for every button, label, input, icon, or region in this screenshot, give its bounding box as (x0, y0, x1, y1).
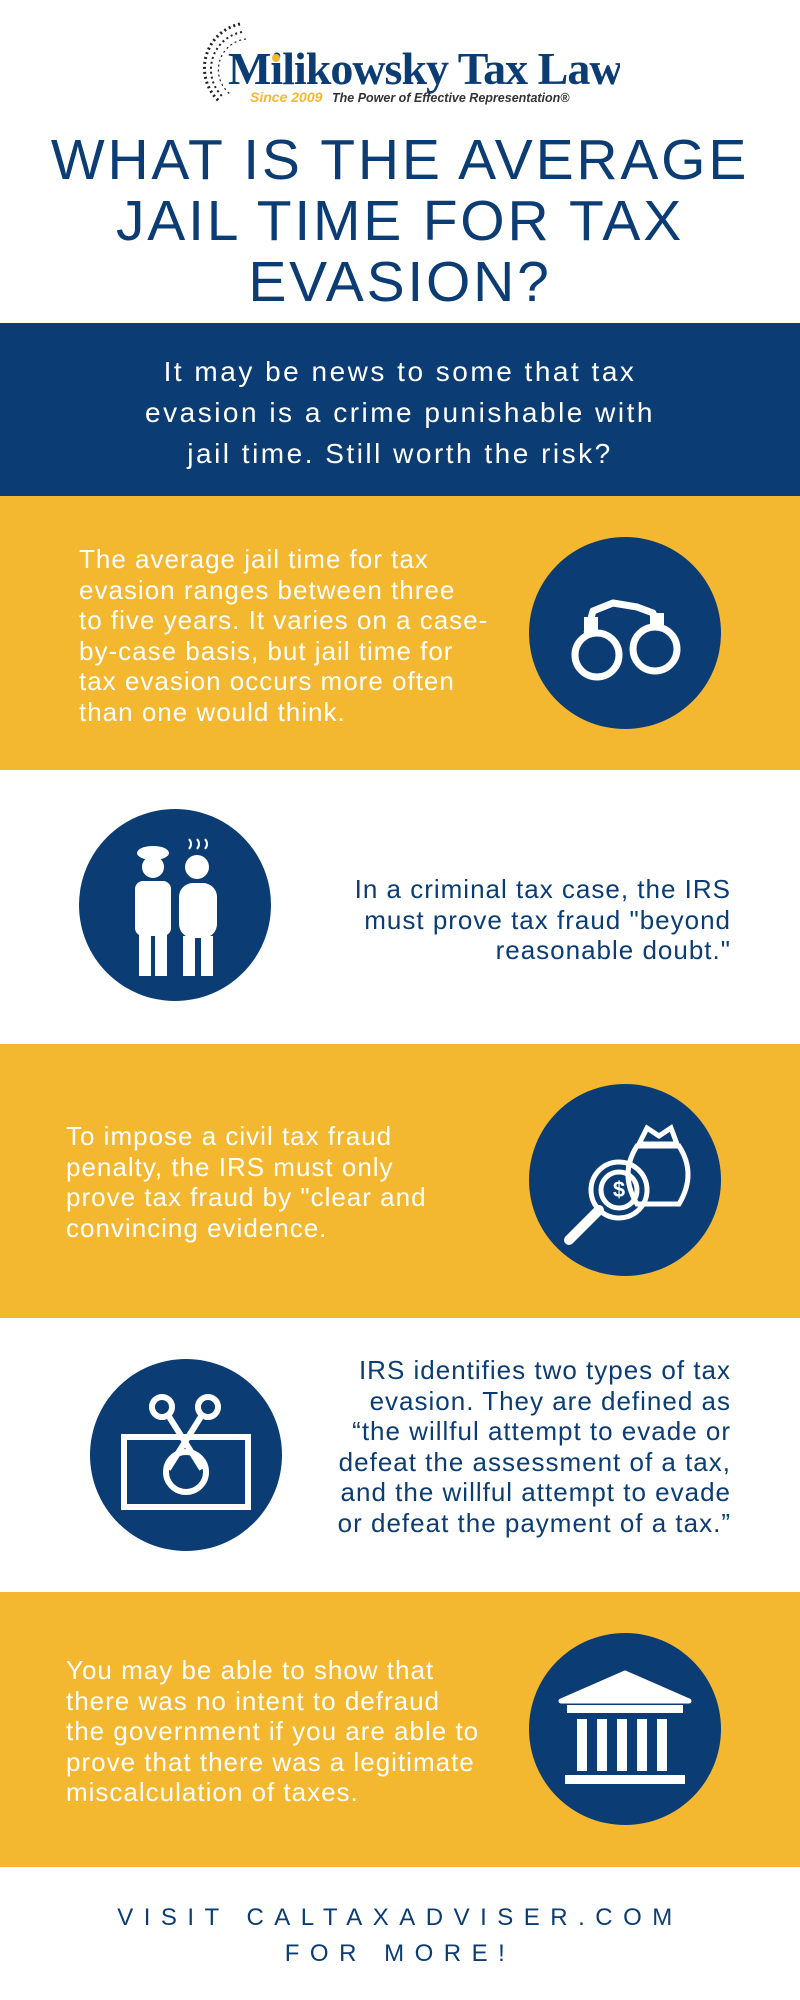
text: criminal tax case: must prove tax fraud "beyond (364, 904, 731, 934)
text: no intent: miscalculation of taxes. (66, 1777, 359, 1807)
logo: Milikowsky Tax Law (228, 43, 620, 94)
panel: beyond reasonable doubt (79, 809, 731, 1001)
icon: magnifier money bag (529, 1084, 721, 1276)
text: average jail time: The average jail time for tax (79, 544, 429, 574)
icon: government building (529, 1633, 721, 1825)
text: average jail time: tax evasion occurs more often (79, 666, 455, 696)
text: civil tax fraud (66, 1121, 427, 1242)
panel: average jail time (0, 496, 800, 770)
text: criminal tax case: In a criminal tax case, the IRS (355, 874, 731, 904)
title: JAIL TIME FOR TAX (116, 189, 684, 253)
intro band: jail time. Still worth the risk? (187, 438, 613, 469)
text: IRS two types (338, 1355, 731, 1538)
text: IRS two types: or defeat the payment of a tax.” (338, 1508, 731, 1538)
text: average jail time: to five years. It varies on a case- (79, 605, 488, 635)
icon: magnifier money bag: $ (613, 1177, 625, 1202)
text: civil tax fraud: prove tax fraud by "clear and (66, 1182, 427, 1212)
text: IRS two types: defeat the assessment of a tax, (339, 1446, 731, 1476)
panel: civil tax fraud (0, 1044, 800, 1318)
text: average jail time: by-case basis, but jail time for (79, 636, 453, 666)
intro band (0, 323, 800, 496)
text: no intent (66, 1655, 479, 1807)
footer: VISIT CALTAXADVISER.COM (117, 1904, 683, 1931)
panel: no intent to defraud (0, 1592, 800, 1867)
logo (202, 22, 620, 105)
text: IRS two types: evasion. They are defined as (370, 1386, 731, 1416)
text: IRS two types: “the willful attempt to evade or (352, 1416, 731, 1446)
footer: FOR MORE! (285, 1940, 515, 1967)
logo: Since 2009 (250, 89, 323, 105)
panel: two types of tax evasion (90, 1355, 731, 1551)
icon: cut money (90, 1359, 282, 1551)
icon: officer and prisoner (79, 809, 271, 1001)
title: WHAT IS THE AVERAGE (51, 128, 749, 192)
title: EVASION? (248, 250, 552, 314)
text: criminal tax case (355, 874, 731, 965)
intro band: evasion is a crime punishable with (145, 397, 655, 428)
text: civil tax fraud: To impose a civil tax fraud (66, 1121, 392, 1151)
text: average jail time: than one would think. (79, 696, 346, 726)
text: no intent: the government if you are able to (66, 1716, 479, 1746)
text: no intent: prove that there was a legitimate (66, 1746, 475, 1776)
text: civil tax fraud: penalty, the IRS must only (66, 1152, 394, 1182)
text: criminal tax case: reasonable doubt." (496, 935, 731, 965)
intro band: It may be news to some that tax (164, 356, 636, 387)
text: average jail time: evasion ranges between three (79, 574, 455, 604)
text: civil tax fraud: convincing evidence. (66, 1212, 327, 1242)
text: no intent: there was no intent to defraud (66, 1686, 440, 1716)
text: no intent: You may be able to show that (66, 1655, 434, 1685)
footer (117, 1904, 683, 1967)
text: IRS two types: and the willful attempt to evade (341, 1477, 731, 1507)
title (51, 128, 749, 314)
icon: handcuffs (529, 537, 721, 729)
text: average jail time (79, 544, 488, 726)
logo: The Power of Effective Representation® (332, 91, 570, 105)
text: IRS two types: IRS identifies two types of tax (359, 1355, 731, 1385)
